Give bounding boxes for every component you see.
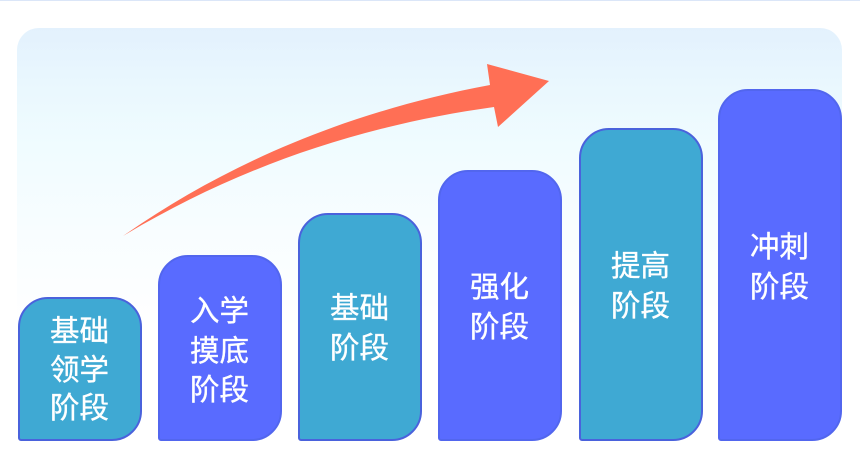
bar: 入学摸底阶段: 阶段 <box>190 374 249 407</box>
bar: 基础阶段: 基础 <box>330 292 389 325</box>
bar: 基础领学阶段: 阶段 <box>50 392 109 425</box>
bar: 基础领学阶段: 领学 <box>50 354 109 386</box>
bar: 冲刺阶段: 阶段 <box>750 270 809 304</box>
bar: 入学摸底阶段: 摸底 <box>190 334 249 368</box>
bar: 入学摸底阶段 <box>158 255 282 441</box>
bar: 基础领学阶段 <box>18 297 142 441</box>
bar: 基础阶段: 阶段 <box>330 332 389 364</box>
bar: 基础阶段 <box>298 213 422 441</box>
panel: gradient background <box>17 28 842 328</box>
bar: 冲刺阶段: 冲刺 <box>750 231 809 264</box>
bar: 基础领学阶段: 基础 <box>50 315 109 348</box>
bar: 入学摸底阶段: 入学 <box>190 295 249 328</box>
bar: 提高阶段: 提高 <box>611 250 670 283</box>
bar: 提高阶段: 阶段 <box>611 290 670 322</box>
bar: 提高阶段 <box>579 128 703 441</box>
bar: 强化阶段 <box>438 170 562 441</box>
bar: 冲刺阶段 <box>718 89 842 441</box>
bar: 强化阶段: 阶段 <box>470 310 529 344</box>
bar: 强化阶段: 强化 <box>470 271 529 304</box>
